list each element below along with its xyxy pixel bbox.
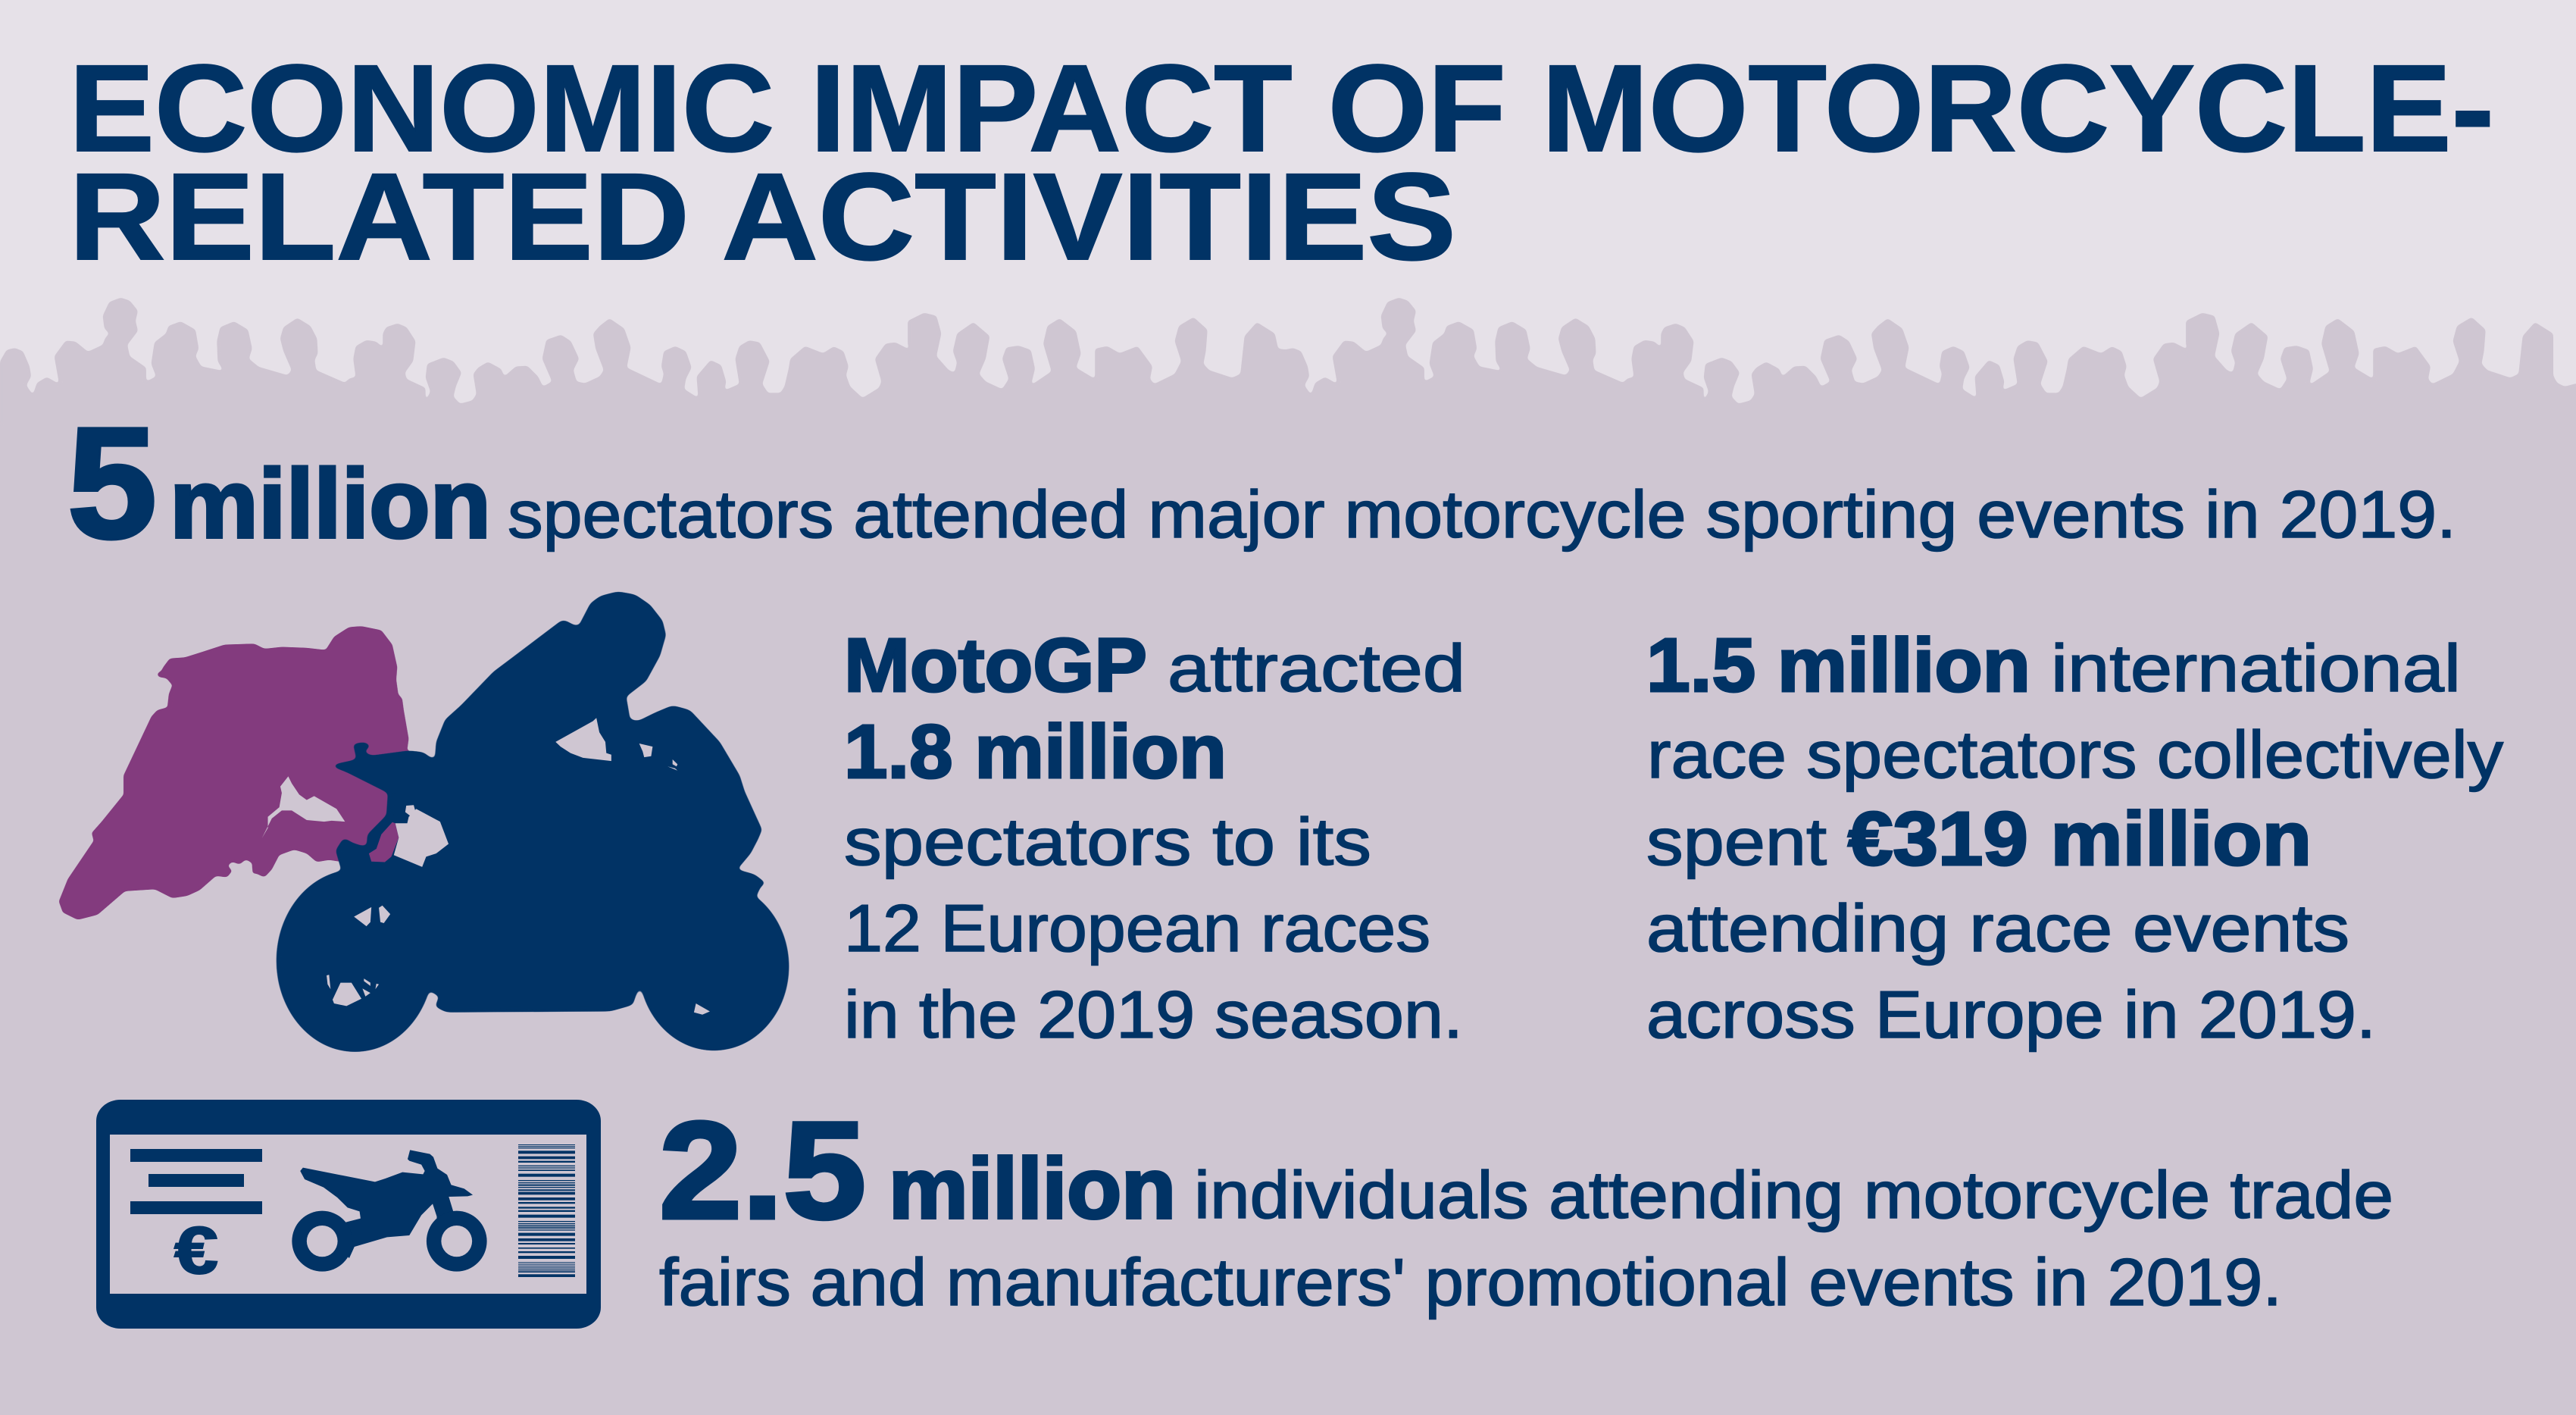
text block: MotoGP spectators [844, 623, 1465, 1052]
ticket text lines [130, 1149, 262, 1214]
title [69, 39, 2494, 286]
statistic: 5 million spectators: million [170, 449, 491, 559]
statistic: 2.5 million trade fair attendees: 2.5 [659, 1093, 866, 1248]
text block: MotoGP spectators: 1.8 million [844, 709, 1227, 794]
text block: MotoGP spectators: in the 2019 season. [844, 977, 1463, 1052]
text block: international race spectators: across Europe in 2019. [1646, 977, 2376, 1052]
rear rider: purple silhouette [59, 626, 416, 920]
small motorcycle [292, 1150, 487, 1272]
gaps in motorcycle silhouette [327, 718, 710, 1015]
text block: MotoGP spectators: 12 European races [844, 891, 1430, 966]
text block: international race spectators: €319 million [1848, 797, 2312, 881]
text block: international race spectators: international [2051, 631, 2461, 706]
statistic: 5 million spectators: 5 [67, 396, 157, 571]
background: crowd silhouette and lower panel [0, 298, 2576, 1415]
text block: international race spectators: attending race events [1646, 891, 2349, 966]
text block: international race spectators: spent [1646, 804, 1827, 879]
front rider and motorcycle: navy silhouette [277, 591, 789, 1052]
title: ECONOMIC IMPACT OF MOTORCYCLE- [69, 39, 2494, 177]
statistic: 5 million spectators [67, 396, 2456, 571]
statistic: 5 million spectators: spectators attended major motorcycle sporting events in 2019. [508, 477, 2456, 552]
ticket frame [96, 1100, 601, 1329]
text block: international race spectators [1646, 623, 2503, 1052]
title: RELATED ACTIVITIES [69, 147, 1456, 286]
text block: MotoGP spectators: attracted [1168, 631, 1465, 706]
statistic: 2.5 million trade fair attendees: million [889, 1141, 1176, 1236]
statistic: 2.5 million trade fair attendees: fairs and manufacturers' promotional events in 2019. [659, 1244, 2282, 1320]
text block: international race spectators: 1.5 million [1646, 623, 2030, 708]
text block: MotoGP spectators: spectators to its [844, 804, 1371, 879]
text block: MotoGP spectators: MotoGP [844, 623, 1147, 708]
barcode [518, 1144, 575, 1277]
ticket inner panel [110, 1135, 586, 1294]
text block: international race spectators: race spectators collectively [1647, 717, 2503, 792]
statistic: 2.5 million trade fair attendees: individuals attending motorcycle trade [1194, 1157, 2393, 1232]
statistic: 2.5 million trade fair attendees [659, 1093, 2393, 1320]
purple gap under fairing [369, 822, 399, 862]
icon: event ticket [96, 1100, 601, 1329]
icon: motorcycle racer silhouette [59, 591, 789, 1052]
euro symbol: € [174, 1213, 218, 1288]
